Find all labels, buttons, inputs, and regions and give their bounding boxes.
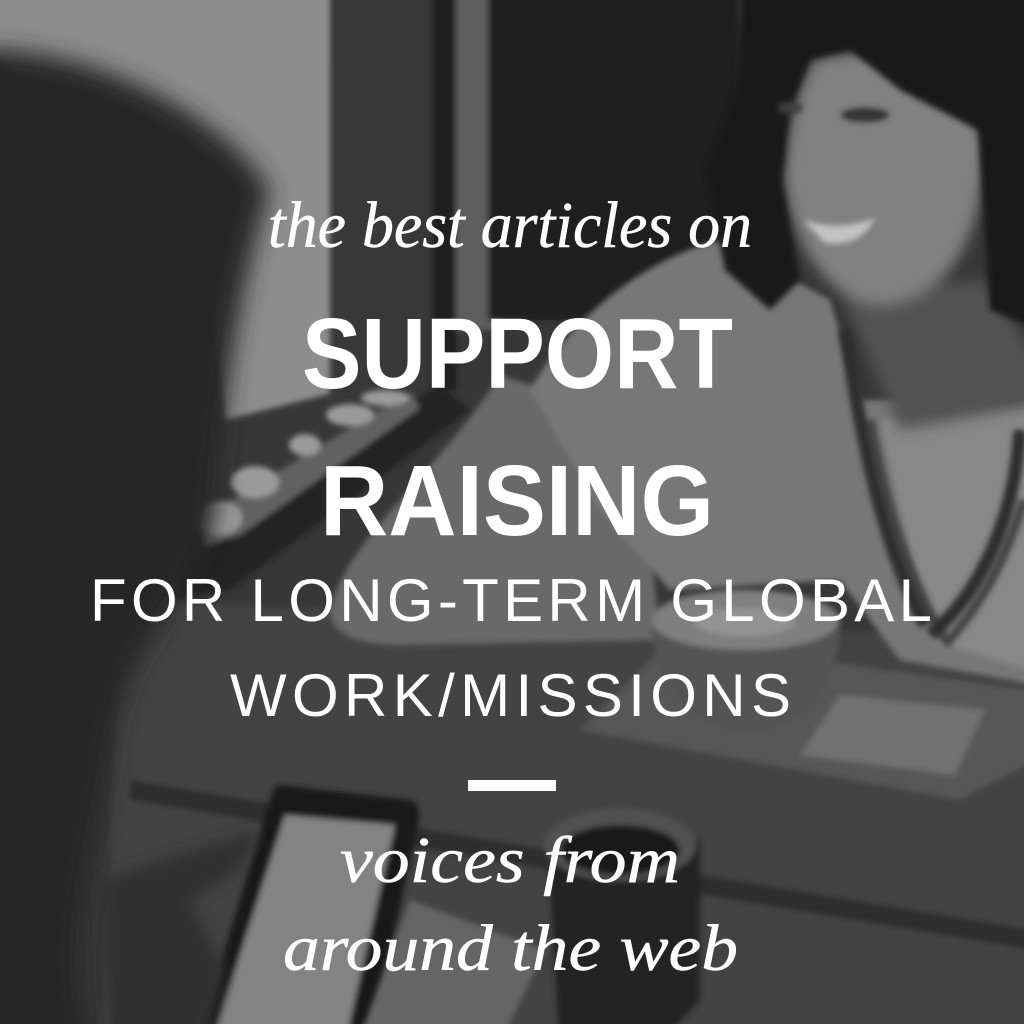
script heading: the best articles on: the best articles on <box>268 189 752 262</box>
title line: SUPPORT: SUPPORT <box>302 298 733 410</box>
window frame <box>330 0 738 400</box>
divider bar <box>468 780 556 791</box>
woman's blouse <box>530 240 1024 690</box>
window sill with stones <box>170 385 470 600</box>
foreground person <box>0 49 270 1024</box>
woman's face <box>785 54 985 305</box>
script line: around the web: around the web <box>283 912 738 985</box>
phone <box>190 785 419 1024</box>
hand holding phone <box>100 830 260 1024</box>
title line: RAISING: RAISING <box>320 445 714 557</box>
necklace <box>845 330 1024 645</box>
woman's neck and chest <box>840 280 1024 430</box>
script line: voices from: voices from <box>340 824 680 897</box>
window light <box>0 0 345 420</box>
coffee cup and saucer <box>580 590 1024 800</box>
subtitle line: FOR LONG-TERM GLOBAL: FOR LONG-TERM GLOBAL <box>90 567 932 634</box>
woman's arm <box>330 375 660 645</box>
subtitle line: WORK/MISSIONS: WORK/MISSIONS <box>230 662 791 729</box>
woman's eyes and smile <box>777 102 889 244</box>
woman's hair <box>705 0 1024 340</box>
paper and mug <box>350 809 700 1024</box>
table <box>100 600 1024 1024</box>
